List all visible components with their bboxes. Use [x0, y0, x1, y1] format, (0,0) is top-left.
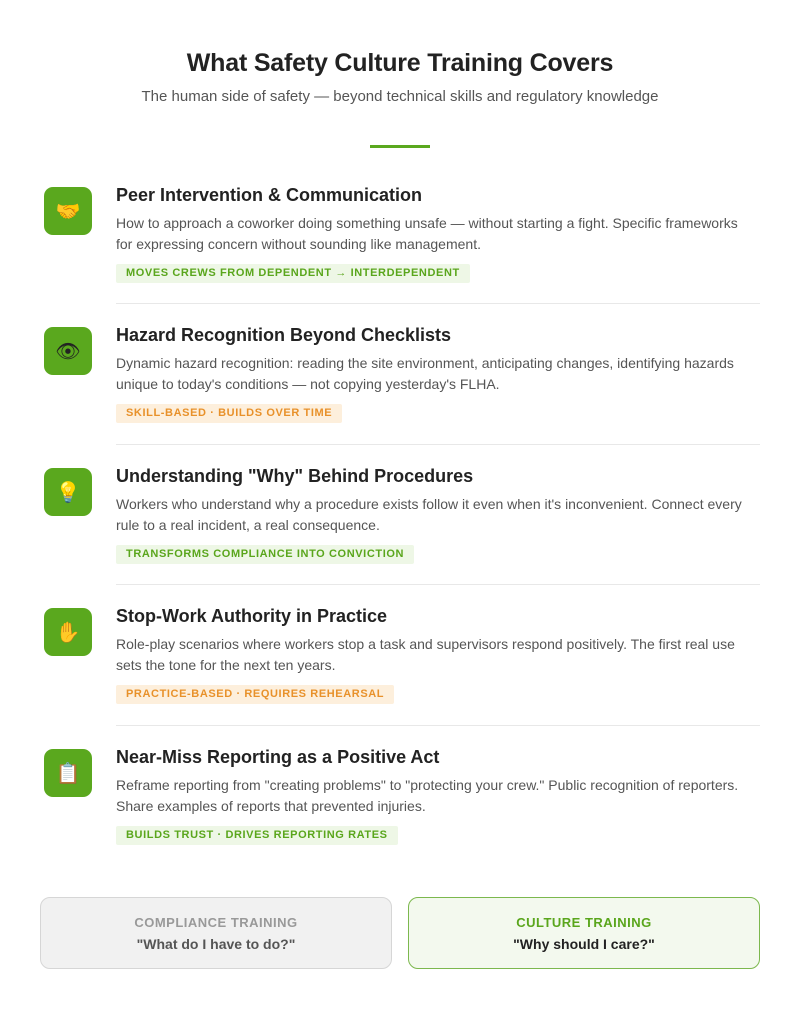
item: hazard recognition: [44, 325, 734, 423]
tag: PRACTICE-BASED · REQUIRES REHEARSAL: [126, 688, 384, 700]
heading: Near-Miss Reporting as a Positive Act: [116, 747, 439, 767]
tag: BUILDS TRUST · DRIVES REPORTING RATES: [126, 829, 388, 841]
description: Workers who understand why a procedure exists follow it even when it's inconvenient. Connect every rule to a real incident, a real consequence.: [116, 496, 742, 533]
panel: culture training: "Why should I care?": [513, 936, 655, 952]
panel: culture training: CULTURE TRAINING: [516, 915, 652, 930]
icon: lightbulb: [44, 468, 92, 516]
icon: clipboard: [44, 749, 92, 797]
description: How to approach a coworker doing something unsafe — without starting a fight. Specific frameworks for expressing concern without sounding like management.: [116, 215, 738, 252]
heading: Peer Intervention & Communication: [116, 185, 422, 205]
icon: hand: [44, 608, 92, 656]
panel: compliance training: [40, 897, 392, 969]
heading: Hazard Recognition Beyond Checklists: [116, 325, 451, 345]
item: why behind procedures: [44, 466, 742, 564]
icon: handshake: [44, 187, 92, 235]
icon: eye: [44, 327, 92, 375]
tag: MOVES CREWS FROM DEPENDENT → INTERDEPENDENT: [126, 267, 460, 279]
tag: [116, 826, 398, 845]
icon: hand: ✋: [56, 620, 80, 644]
icon: lightbulb: 💡: [56, 480, 80, 504]
panel: compliance training: COMPLIANCE TRAINING: [134, 915, 298, 930]
icon: handshake: 🤝: [56, 199, 80, 223]
description: Dynamic hazard recognition: reading the site environment, anticipating changes, identifying hazards unique to today's conditions — not copying yesterday's FLHA.: [116, 355, 734, 392]
icon: clipboard: 📋: [56, 761, 80, 785]
heading: Stop-Work Authority in Practice: [116, 606, 387, 626]
description: Role-play scenarios where workers stop a task and supervisors respond positively. The first real use sets the tone for the next ten years.: [116, 636, 735, 673]
tag: SKILL-BASED · BUILDS OVER TIME: [126, 407, 332, 419]
tag: [116, 685, 394, 704]
icon: eye: 👁: [55, 339, 81, 363]
accent line: [370, 145, 430, 148]
description: Reframe reporting from "creating problems" to "protecting your crew." Public recognition of reporters. Share examples of reports that prevented injuries.: [116, 777, 738, 814]
item: peer intervention: [44, 185, 738, 283]
subtitle: The human side of safety — beyond technical skills and regulatory knowledge: [142, 88, 658, 105]
title: What Safety Culture Training Covers: [187, 49, 613, 77]
panel: culture training: [408, 897, 760, 969]
item: near-miss reporting: [44, 747, 738, 845]
tag: [116, 545, 414, 564]
item: stop-work authority: [44, 606, 735, 704]
panel: compliance training: "What do I have to do?": [137, 936, 295, 952]
tag: [116, 404, 342, 423]
heading: Understanding "Why" Behind Procedures: [116, 466, 473, 486]
tag: TRANSFORMS COMPLIANCE INTO CONVICTION: [126, 548, 404, 560]
tag: [116, 264, 470, 283]
